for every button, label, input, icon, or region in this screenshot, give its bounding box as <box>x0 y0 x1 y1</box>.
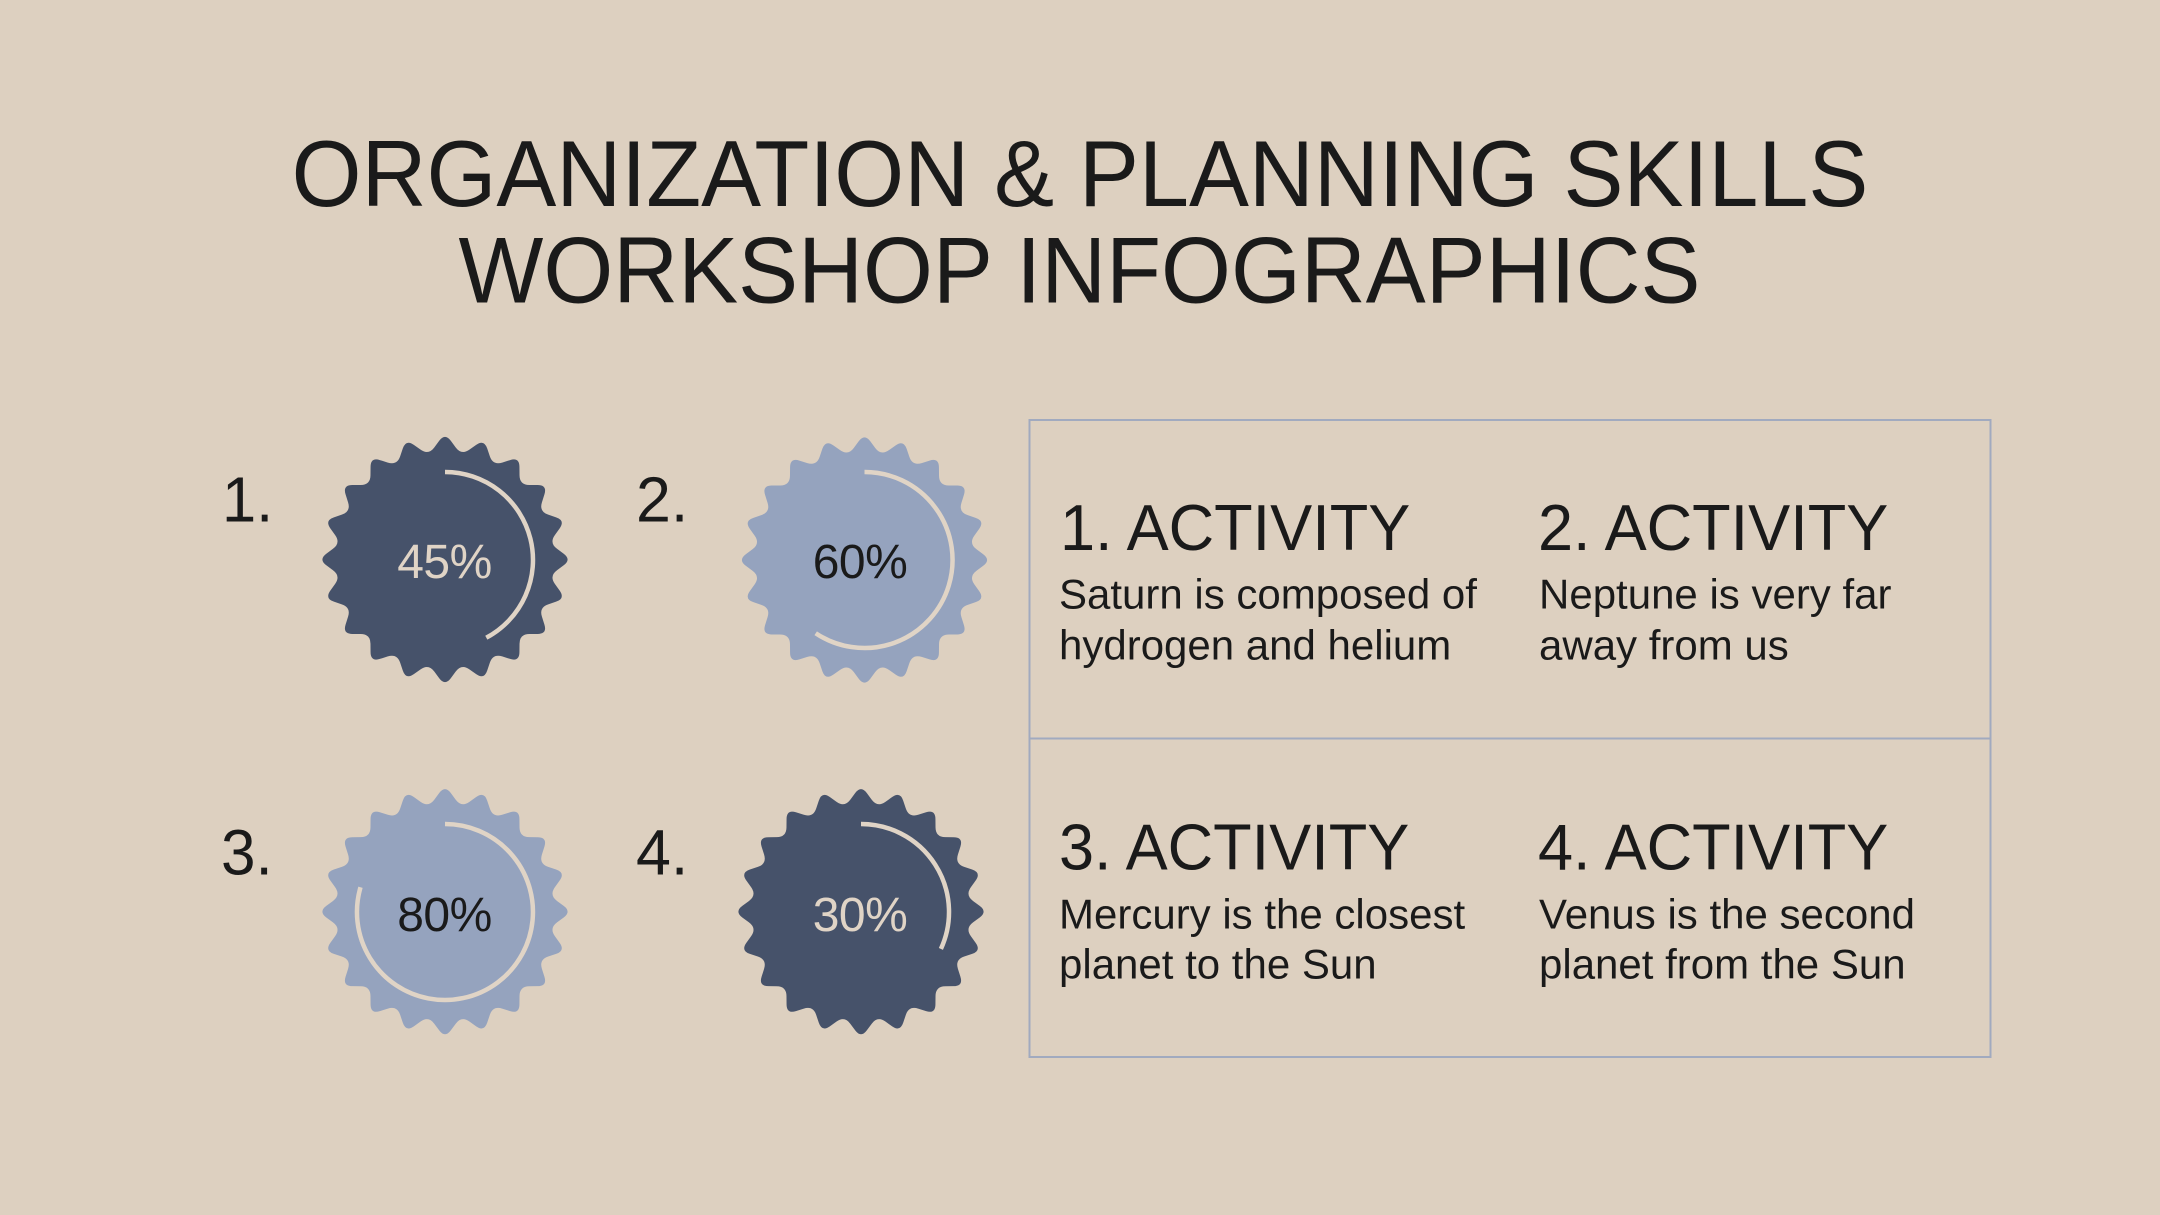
badge 1: 45% <box>322 437 568 682</box>
activity 2: Neptune is very far <box>1539 571 1892 618</box>
activity 4 <box>1538 810 1915 988</box>
activity 1: Saturn is composed of <box>1059 571 1477 618</box>
activity 4: Venus is the second <box>1539 891 1915 938</box>
activity 1: hydrogen and helium <box>1059 621 1451 668</box>
activity 4: planet from the Sun <box>1539 941 1906 988</box>
badge 2: 60%: 60% <box>813 536 907 589</box>
title <box>292 122 1868 323</box>
badge 4: 30%: 30% <box>813 889 907 942</box>
number label 3: 3. <box>221 818 273 889</box>
title: WORKSHOP INFOGRAPHICS <box>459 219 1700 323</box>
number label 2: 2. <box>636 465 688 536</box>
activity 3: 3. ACTIVITY <box>1059 810 1409 884</box>
activity 1: 1. ACTIVITY <box>1060 491 1410 564</box>
title: ORGANIZATION & PLANNING SKILLS <box>292 122 1868 226</box>
activity 3: planet to the Sun <box>1059 941 1377 988</box>
activity 1 <box>1059 491 1477 668</box>
badge 4: 30% <box>738 789 984 1034</box>
activity 2: away from us <box>1539 621 1789 668</box>
activity 2: 2. ACTIVITY <box>1538 491 1888 564</box>
activity table frame <box>1030 420 1990 1057</box>
activity 3: Mercury is the closest <box>1059 891 1465 938</box>
badge 2: 60% <box>742 437 987 683</box>
badge 3: 80%: 80% <box>397 889 492 942</box>
badge 3: 80% <box>322 789 568 1034</box>
number label 1: 1. <box>222 465 273 536</box>
number label 4: 4. <box>636 818 688 889</box>
activity 3 <box>1059 810 1465 988</box>
activity 4: 4. ACTIVITY <box>1538 810 1888 884</box>
activity 2 <box>1538 491 1892 668</box>
badge 1: 45%: 45% <box>397 536 492 589</box>
